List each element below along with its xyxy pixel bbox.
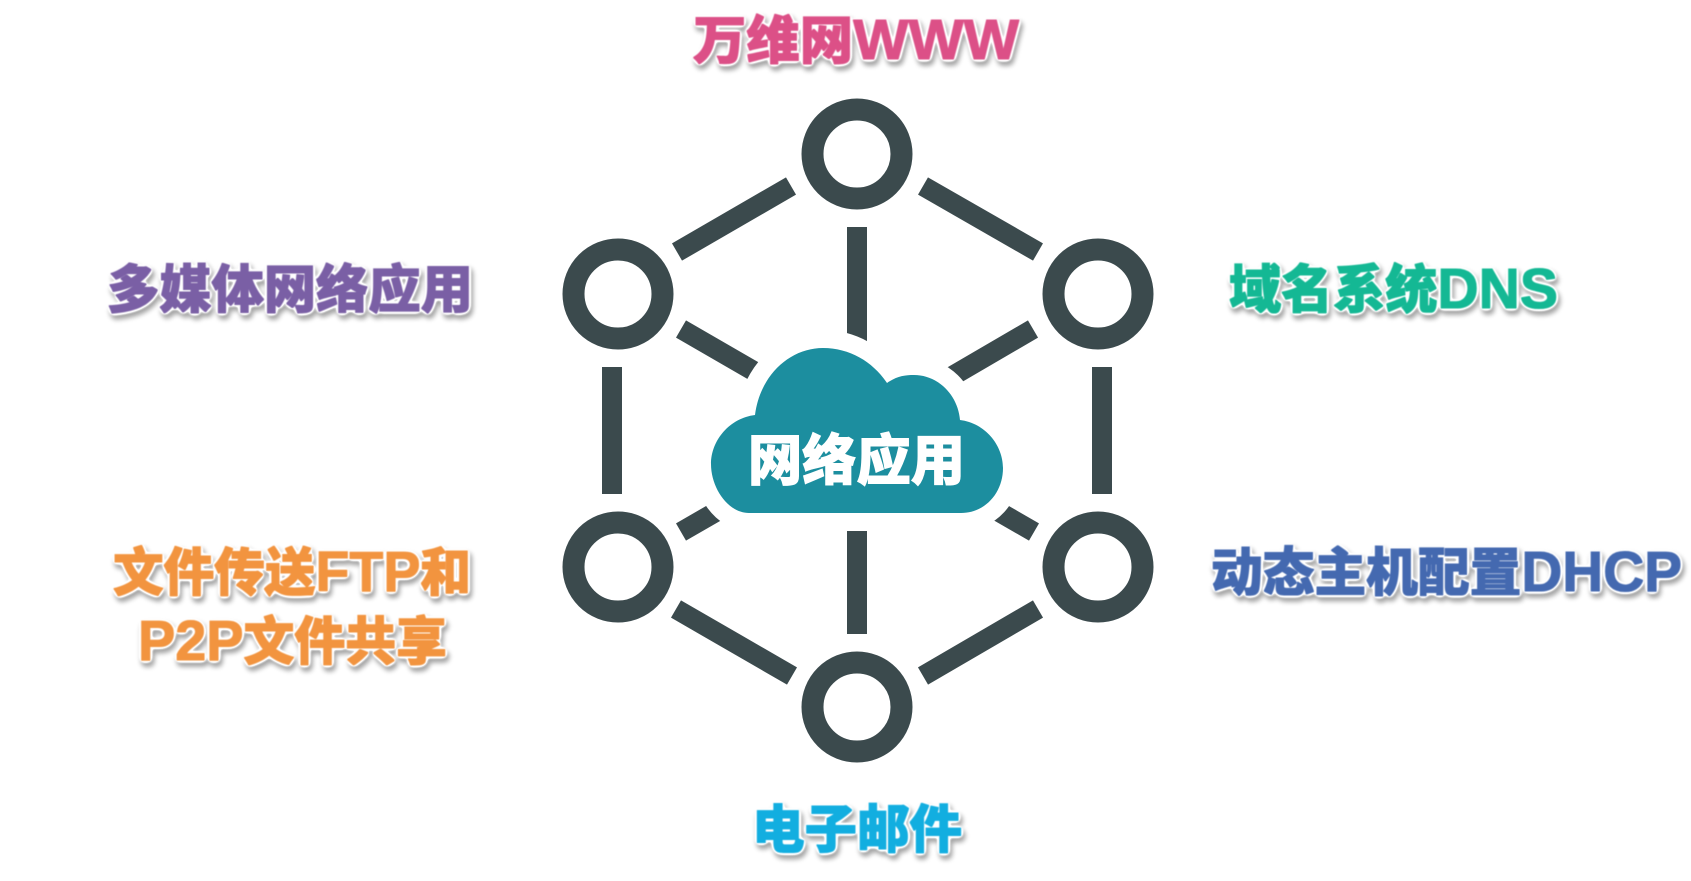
cloud title: 网络应用 — [748, 430, 965, 492]
label line 1: 文件传送FTP和 — [113, 540, 471, 604]
label: DNS: 域名系统DNS — [1229, 257, 1558, 321]
label: email: 电子邮件 — [752, 802, 962, 860]
label: multimedia: 多媒体网络应用 — [107, 262, 473, 320]
label: FTP and P2P — [113, 540, 471, 673]
center cloud with title — [711, 348, 1003, 513]
connector lines — [612, 186, 1102, 676]
label line 2: P2P文件共享 — [138, 609, 447, 673]
label: DHCP: 动态主机配置DHCP — [1211, 540, 1682, 604]
label: WWW: 万维网WWW — [693, 8, 1019, 72]
cloud shape — [711, 348, 1003, 513]
node rings — [574, 110, 1142, 752]
